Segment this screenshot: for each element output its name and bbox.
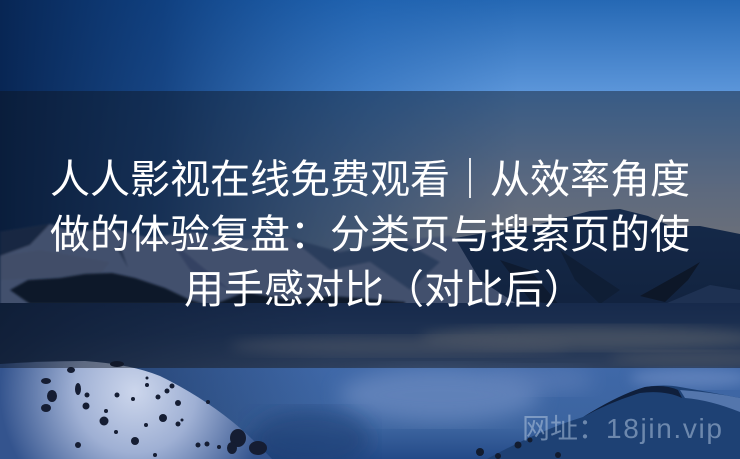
snowy hill, lower left: [0, 361, 272, 459]
snowy hill, lower right: [476, 386, 740, 459]
dark rock strip: [10, 273, 405, 306]
watermark: site address: 网址：18jin.vip: [522, 413, 724, 444]
sky: [0, 0, 740, 310]
dark translucent overlay band: [0, 91, 740, 368]
title: 人人影视在线免费观看｜从效率角度: [50, 158, 690, 202]
right mountain: [455, 209, 740, 306]
left snowy mountains: [0, 224, 540, 306]
sea of clouds: [0, 303, 740, 459]
title: 用手感对比（对比后）: [184, 268, 584, 312]
title: [50, 158, 690, 312]
title: 做的体验复盘：分类页与搜索页的使: [50, 213, 690, 257]
